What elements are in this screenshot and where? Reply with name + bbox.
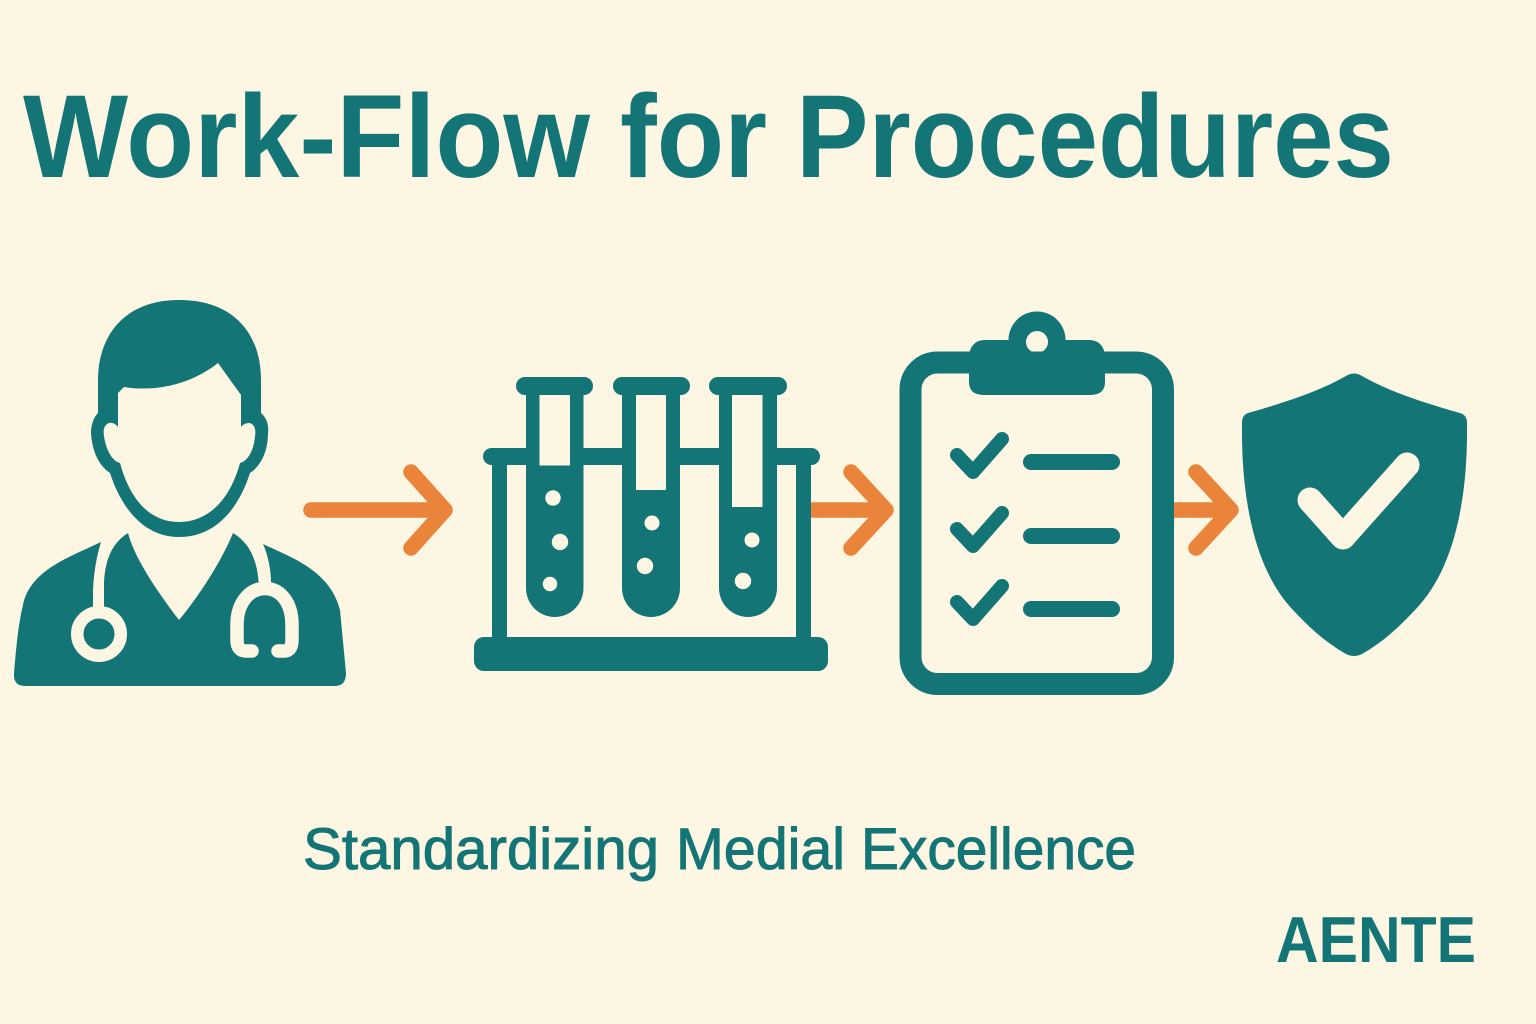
brand label: AENTE <box>1276 903 1476 976</box>
icon: doctor <box>14 300 346 686</box>
rack <box>474 448 828 671</box>
title: Procedures <box>796 71 1394 203</box>
doctor body <box>14 533 346 686</box>
title: Work-Flow <box>23 71 591 203</box>
subtitle: Medial <box>676 817 845 882</box>
icon: shield <box>1242 374 1467 656</box>
subtitle: Standardizing <box>303 817 659 882</box>
arrow 1 <box>311 472 445 548</box>
shield check <box>1310 465 1407 537</box>
checklist lines <box>1031 462 1112 609</box>
stethoscope <box>77 526 292 656</box>
icon: clipboard <box>910 312 1163 684</box>
title: for <box>620 71 767 203</box>
tube 2 <box>613 377 690 617</box>
stethoscope earpiece <box>237 588 292 651</box>
tube 3 <box>709 377 787 617</box>
doctor head and hair <box>91 300 268 537</box>
stethoscope right tube <box>233 526 271 592</box>
arrow 3 <box>1168 472 1231 548</box>
arrow 2 <box>806 472 886 548</box>
tube 1 <box>516 377 593 617</box>
icon: test tubes <box>474 377 828 671</box>
clipboard clip <box>969 312 1105 395</box>
stethoscope chest piece <box>77 612 121 656</box>
subtitle: Excellence <box>861 817 1136 882</box>
stethoscope left tube <box>93 526 128 610</box>
checkmarks <box>957 439 1002 619</box>
